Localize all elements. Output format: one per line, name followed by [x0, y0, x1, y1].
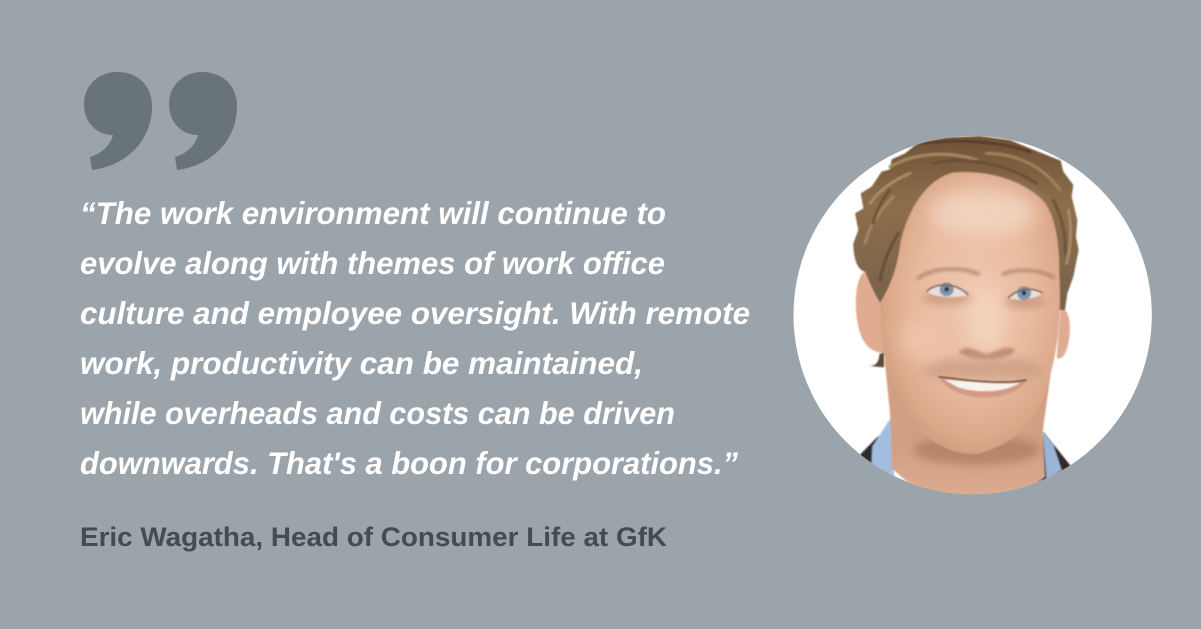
face — [880, 172, 1060, 454]
smile — [938, 377, 1027, 398]
sideburn strand — [869, 353, 884, 367]
quote text: while overheads and costs can be driven — [80, 395, 675, 431]
quote text: “The work environment will continue to — [80, 195, 666, 231]
ears — [856, 272, 1070, 359]
eyes — [927, 282, 1043, 300]
face shading — [900, 190, 1045, 378]
attribution: Eric Wagatha, Head of Consumer Life at GfK — [80, 522, 668, 552]
icon: quotation marks — [84, 72, 237, 170]
quote text: work, productivity can be maintained, — [80, 345, 643, 381]
chin shadow on neck — [913, 435, 1040, 465]
quote text: evolve along with themes of work office — [80, 245, 665, 281]
hair strands — [865, 141, 1071, 280]
portrait photo — [793, 136, 1152, 497]
quote text: culture and employee oversight. With remote — [80, 295, 750, 331]
neck — [885, 360, 1051, 497]
eyebrows — [918, 269, 1053, 278]
quote text — [80, 195, 750, 481]
hair — [853, 136, 1079, 310]
quote card — [80, 72, 1152, 552]
quote text: downwards. That's a boon for corporations.” — [80, 445, 738, 481]
jacket and shirt — [860, 420, 1071, 482]
